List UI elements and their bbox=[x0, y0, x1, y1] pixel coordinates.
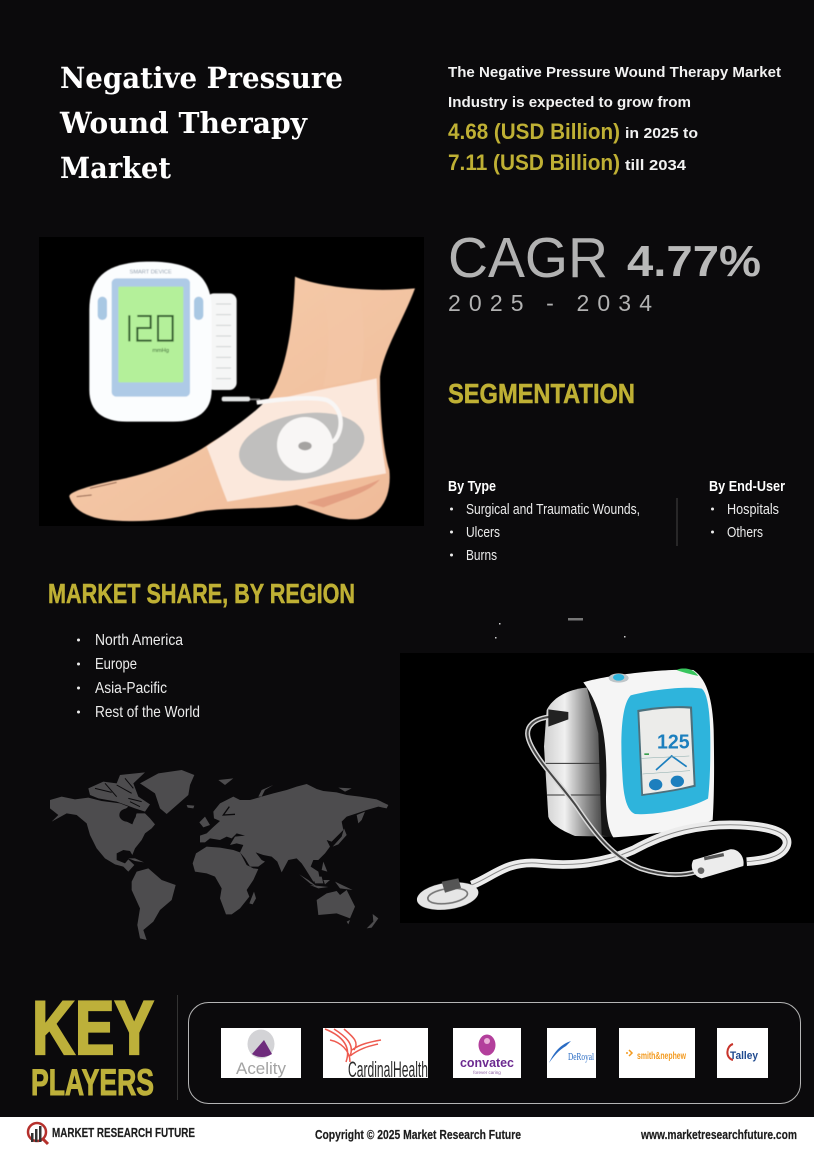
region list bbox=[77, 632, 200, 721]
market growth summary: 7.11 (USD Billion) bbox=[448, 150, 620, 175]
heading: market share by region: MARKET SHARE, BY REGION bbox=[48, 578, 355, 609]
dressing pad bbox=[415, 878, 480, 914]
illustration: wound therapy device bbox=[400, 653, 814, 923]
panel: key players logos bbox=[188, 1002, 800, 1104]
illustration: wound therapy device: 125 bbox=[657, 731, 690, 754]
heading: key players bbox=[31, 986, 154, 1103]
heading: segmentation: SEGMENTATION bbox=[448, 378, 635, 409]
illustration: foot with wound therapy monitor bbox=[39, 237, 424, 526]
heading: key players: KEY bbox=[32, 986, 154, 1071]
market growth summary: Industry is expected to grow from bbox=[448, 94, 691, 111]
illustration: foot with wound therapy monitor: mmHg bbox=[152, 348, 169, 354]
monitor body bbox=[89, 262, 212, 422]
heading: key players: PLAYERS bbox=[31, 1062, 154, 1103]
footer: Copyright © 2025 Market Research Future bbox=[315, 1127, 521, 1142]
CAGR: CAGR bbox=[448, 226, 608, 290]
stray marks bbox=[495, 618, 626, 638]
segmentation: by type: Surgical and Traumatic Wounds, bbox=[466, 501, 640, 518]
logo: Convatec bbox=[453, 1028, 521, 1078]
segmentation: by end-user bbox=[709, 478, 785, 541]
logo: DeRoyal: DeRoyal bbox=[568, 1052, 594, 1063]
market growth summary bbox=[448, 64, 781, 175]
world map bbox=[50, 770, 388, 940]
market growth summary: till 2034 bbox=[625, 157, 687, 174]
logo: DeRoyal bbox=[547, 1028, 596, 1078]
region list: Rest of the World bbox=[95, 704, 200, 721]
footer bbox=[0, 1117, 814, 1150]
illustration: foot with wound therapy monitor: SMART DEVICE bbox=[130, 269, 172, 275]
logo: Acelity: Acelity bbox=[236, 1059, 286, 1078]
footer: MARKET RESEARCH FUTURE bbox=[52, 1125, 195, 1140]
segmentation: by type bbox=[448, 478, 640, 564]
screen bbox=[637, 706, 696, 796]
title: Negative Pressure bbox=[60, 61, 343, 95]
segmentation: by type: Ulcers bbox=[466, 524, 500, 541]
connector tube bbox=[222, 397, 250, 401]
title: Market bbox=[60, 151, 172, 185]
monitor cuff bbox=[207, 293, 237, 390]
Eurasia, Africa and Oceania bbox=[193, 778, 388, 928]
logo: Convatec: convatec bbox=[460, 1055, 514, 1070]
market growth summary: 4.68 (USD Billion) bbox=[448, 119, 620, 144]
logo: Cardinal Health bbox=[323, 1028, 428, 1082]
title bbox=[59, 61, 343, 185]
tubing bbox=[472, 825, 787, 885]
region list: North America bbox=[95, 632, 183, 649]
logo: Cardinal Health: CardinalHealth bbox=[348, 1057, 428, 1082]
inline connector bbox=[692, 849, 744, 878]
CAGR: 2025 - 2034 bbox=[448, 290, 652, 316]
foot bbox=[69, 277, 415, 521]
bandage bbox=[207, 378, 386, 502]
CAGR: 4.77% bbox=[627, 237, 761, 286]
segmentation: by type: Burns bbox=[466, 547, 497, 564]
housing bbox=[583, 670, 714, 837]
market growth summary: in 2025 to bbox=[625, 125, 698, 142]
logo: Talley: Talley bbox=[730, 1050, 759, 1062]
segmentation: by end-user: Others bbox=[727, 524, 763, 541]
buttons bbox=[609, 673, 629, 683]
region list: Asia-Pacific bbox=[95, 680, 167, 697]
logo: Smith & Nephew: smith&nephew bbox=[637, 1050, 687, 1062]
logo: Convatec: forever caring bbox=[473, 1070, 501, 1075]
Americas and Greenland bbox=[50, 770, 194, 940]
logo: Talley bbox=[717, 1028, 768, 1078]
title: Wound Therapy bbox=[59, 106, 308, 140]
region list: Europe bbox=[95, 656, 137, 673]
blue frame bbox=[621, 688, 710, 814]
logo: Smith & Nephew bbox=[619, 1028, 695, 1078]
canister bbox=[544, 687, 613, 837]
monitor reading bbox=[129, 315, 173, 341]
segmentation: by end-user: By End-User bbox=[709, 478, 785, 495]
segmentation: by type: By Type bbox=[448, 478, 496, 495]
segmentation: by end-user: Hospitals bbox=[727, 501, 779, 518]
CAGR bbox=[448, 226, 761, 316]
logo: Acelity bbox=[221, 1028, 301, 1078]
market growth summary: The Negative Pressure Wound Therapy Market bbox=[448, 64, 781, 81]
icon: market research future logo bbox=[28, 1123, 48, 1144]
